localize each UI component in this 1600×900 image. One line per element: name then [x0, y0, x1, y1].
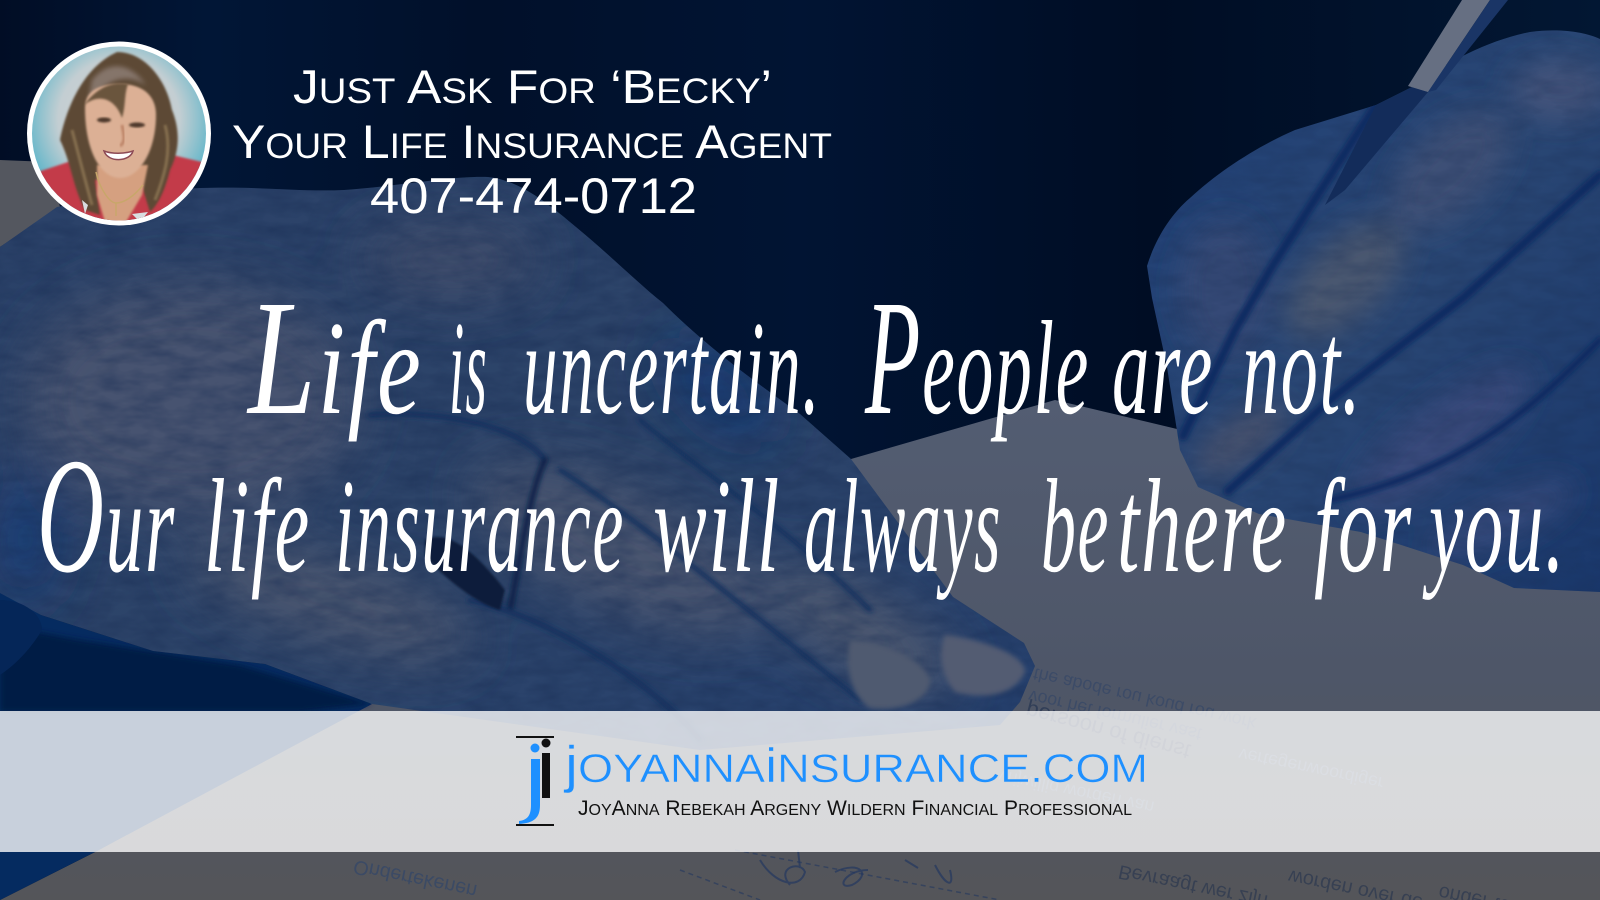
jewellery	[82, 200, 148, 219]
photo backdrop	[32, 46, 206, 220]
quote line two	[37, 424, 1566, 607]
website address: jOYANNA iNSURANCE.COM	[563, 736, 1148, 794]
quote line two: insurance	[335, 452, 625, 600]
ghost document text: vertegenwoordiger	[1237, 744, 1385, 793]
necklace	[96, 172, 143, 216]
blue table area at left	[0, 590, 372, 900]
footer translucent band	[0, 711, 1600, 852]
bangs	[84, 83, 128, 118]
main quote	[37, 266, 1566, 607]
quote line two: will	[653, 452, 781, 600]
blue j	[519, 759, 540, 824]
finger creases	[1183, 105, 1600, 500]
pen	[1325, 0, 1508, 205]
nose shadow	[120, 125, 124, 146]
quote line two: always	[804, 452, 1002, 600]
quote line one: is	[449, 294, 488, 442]
agent contact heading	[232, 60, 832, 224]
tagline: JOYANNA REBEKAH ARGENY WILDERN FINANCIAL PROFESSIONAL	[578, 797, 1132, 820]
thumb shadow at left edge	[0, 600, 42, 675]
agent portrait	[27, 42, 211, 228]
ghost document text: voor het formulier vast	[1026, 686, 1204, 745]
quote line one	[247, 266, 1362, 449]
dark table shadow	[0, 625, 372, 712]
jacket	[40, 154, 202, 220]
smile	[104, 151, 133, 160]
eyes	[97, 118, 145, 128]
right hand	[1140, 30, 1600, 600]
document paper	[0, 400, 1600, 900]
quote line one: People	[864, 266, 1090, 449]
line: just ask for Becky: JUST ASK FOR ‘BECKY’	[293, 60, 772, 113]
black i dot	[542, 738, 550, 748]
bottom bar	[516, 824, 554, 826]
logo: ji monogram	[516, 736, 554, 826]
black i	[542, 753, 550, 798]
quote line two: Our	[37, 424, 176, 607]
skin texture	[1, 181, 1024, 711]
blue j dot	[530, 744, 540, 752]
portrait ring	[27, 42, 211, 226]
finger nails	[848, 640, 930, 709]
quote line one: Life	[247, 266, 423, 449]
ring	[425, 537, 505, 610]
knuckle highlights	[1180, 60, 1600, 574]
finger creases	[370, 414, 870, 740]
hair strands	[72, 125, 168, 205]
left hand	[0, 170, 1050, 750]
ghost document text: the abode rou koud rou work	[1031, 664, 1258, 734]
quote line two: there	[1117, 452, 1288, 600]
sleeve shadow	[0, 207, 72, 268]
skin texture	[1162, 34, 1594, 519]
chest	[97, 165, 148, 222]
quote line two: for	[1314, 452, 1413, 600]
ghost document text: vrijwillig worden van	[997, 766, 1156, 818]
hair	[60, 52, 178, 215]
quote line one: are	[1112, 294, 1214, 442]
handwritten signature on paper	[760, 850, 951, 886]
quote line one: uncertain.	[523, 294, 821, 442]
quote line one: not.	[1242, 294, 1362, 442]
dashed signature line	[680, 850, 1000, 900]
quote line two: be	[1041, 452, 1110, 600]
line: your life insurance agent: YOUR LIFE INSURANCE AGENT	[232, 115, 832, 168]
grey sleeve at top-left	[0, 160, 60, 247]
skin highlights	[0, 220, 975, 720]
hair highlight	[87, 64, 145, 96]
quote line two: life	[204, 452, 311, 600]
phone number: 407-474-0712	[370, 168, 697, 224]
top bar	[516, 736, 554, 738]
ghost document text: persoon of dienst	[1023, 698, 1193, 765]
face	[85, 84, 156, 178]
ghost document text	[352, 664, 1512, 900]
